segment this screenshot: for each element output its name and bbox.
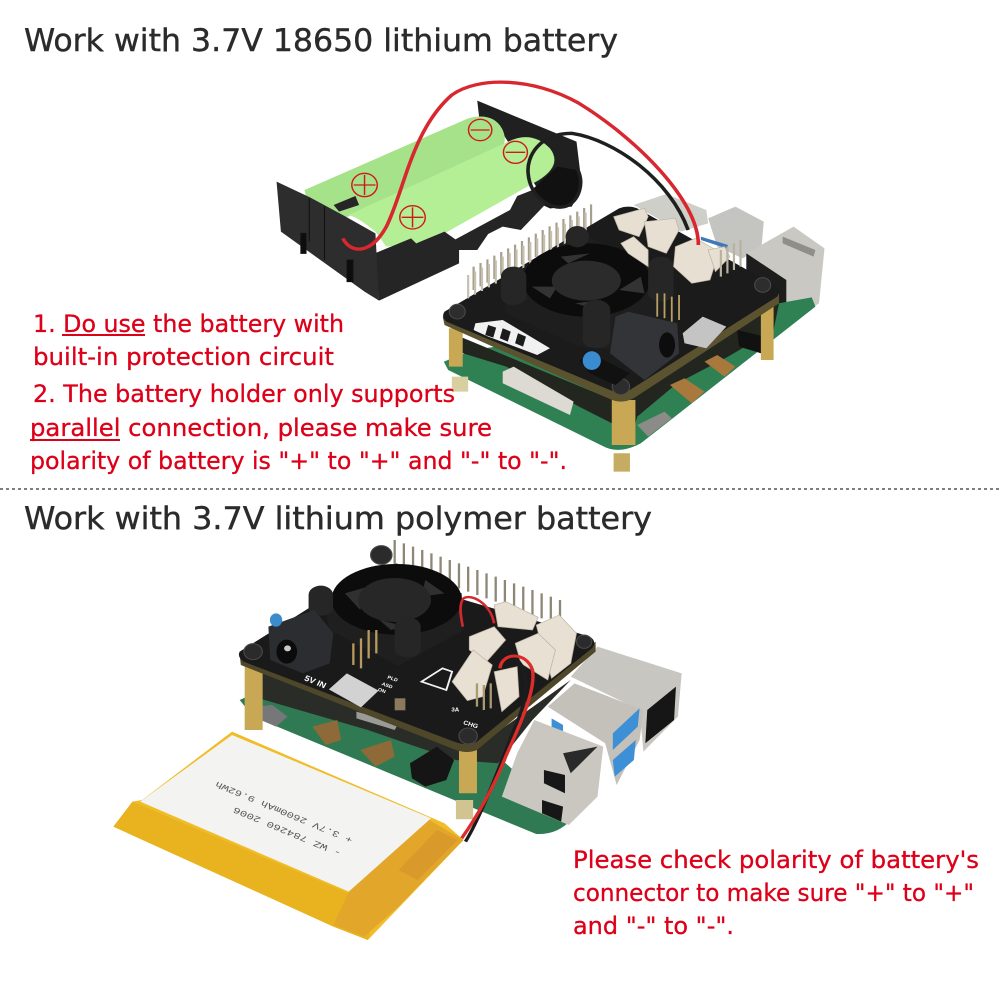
green cell, front [348,137,554,247]
expansion board [239,573,594,744]
red note: 2: parallel connection, please make sure [30,414,492,442]
red wire [343,82,698,249]
fan [309,563,464,666]
dark gap between boards [452,303,779,430]
negative terminal tab [334,196,359,212]
holder front wall [375,190,546,301]
screws [244,546,592,744]
screws [449,278,771,395]
board silkscreen labels: PLD [386,675,399,684]
standoffs [245,667,477,819]
DC jack [268,610,333,673]
battery print: - WZ 784260 2006 [232,804,343,857]
board edge [240,642,596,752]
fan wire [460,597,494,627]
JST connectors [614,208,730,283]
ribbon connector [503,367,574,415]
JST connectors [452,602,576,712]
USB-C socket [329,673,379,707]
red note: 1 [33,310,344,371]
board edge [443,293,779,402]
black wire [465,658,526,842]
holder floor [525,167,581,208]
board silkscreen labels: 5V IN [303,673,328,690]
standoffs [449,303,774,472]
battery level indicator [474,320,550,355]
Raspberry Pi board, top [444,297,815,450]
holder end plate [277,182,379,301]
expansion board [443,207,779,392]
Ethernet port [571,647,682,752]
USB-C socket [683,317,726,348]
red note: 2: polarity of battery is "+" to "+" and "-" to "-". [30,447,567,475]
board silkscreen labels [303,673,479,730]
board silkscreen labels: 3A [451,708,459,714]
header pins, front row [468,213,586,298]
pin header near jack [657,293,679,322]
pin header near connector [477,683,491,710]
heading: 18650 battery: Work with 3.7V 18650 lithium battery [24,23,618,59]
red note: 1: built-in protection circuit [33,343,334,371]
red note: polymer polarity: Please check polarity of battery's [573,846,979,874]
header pins [395,540,560,625]
polarity marks [352,119,527,229]
red note: polymer polarity: connector to make sure "+" to "+" [573,879,974,907]
photo: polymer battery and board [113,540,682,940]
battery print [214,779,355,857]
USB 2 port [502,720,603,825]
battery label [140,735,431,892]
lower board details [255,705,454,787]
red wire [462,656,533,838]
red note: polymer polarity: and "-" to "-". [573,912,734,940]
battery holder [277,101,582,301]
red note: 2 [30,380,567,475]
green cell, back [305,117,505,218]
fan [501,226,674,350]
polymer battery [113,732,464,940]
battery print: + 3.7V 2600mAh 9.62Wh [214,779,355,844]
pin header [721,240,740,277]
Raspberry Pi ports, top [634,194,824,320]
photo: 18650 holder and board [277,82,824,472]
black wire [528,133,688,230]
header pins, back row [474,204,591,290]
pin header [353,630,376,668]
dark gap between boards [245,663,571,763]
micro HDMI and USB-C ports [637,330,772,437]
USB 3 port [548,683,643,785]
warning icon [421,668,452,690]
component [395,698,405,710]
red note: 1: 1. Do use the battery with [33,310,344,338]
DC jack [610,312,679,380]
red note: 2: 2. The battery holder only supports [33,380,455,408]
red note: polymer polarity [573,846,979,940]
board silkscreen labels: ASD [380,682,394,691]
heading: lithium polymer battery: Work with 3.7V lithium polymer battery [24,501,652,537]
blue button [579,351,630,385]
board silkscreen labels: ON [377,687,387,695]
holder back plate [477,101,582,208]
Raspberry Pi board, bottom [240,677,571,834]
board silkscreen labels: CHG [462,720,479,730]
